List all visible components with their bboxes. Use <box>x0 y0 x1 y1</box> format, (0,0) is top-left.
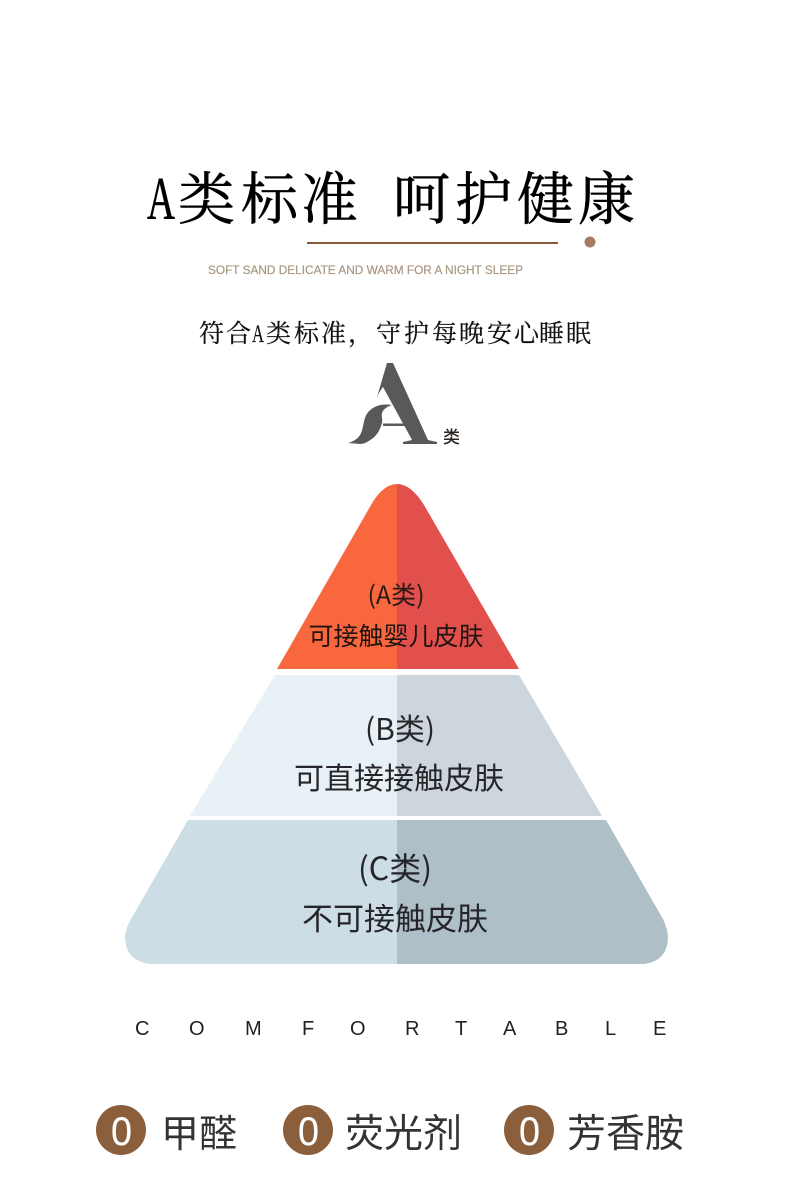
badge: zero fluorescent agent: 荧光剂 <box>345 1103 462 1159</box>
badge: zero fluorescent agent <box>283 1103 462 1159</box>
tagline: 类标准，守护每晚安心睡眠 <box>266 320 591 348</box>
badge: zero formaldehyde: 0 <box>111 1110 132 1154</box>
badge: zero aromatic amine: 芳香胺 <box>567 1103 684 1159</box>
english subtitle: SOFT SAND DELICATE AND WARM FOR A NIGHT SLEEP <box>208 265 523 277</box>
pyramid chart <box>125 484 668 964</box>
tagline: 符合 <box>199 320 251 348</box>
badge: zero formaldehyde: 甲醛 <box>161 1103 237 1158</box>
tagline: A <box>252 321 264 348</box>
tier C: (C类) <box>358 844 432 890</box>
badge: zero fluorescent agent: 0 <box>298 1110 319 1154</box>
badge: zero aromatic amine <box>504 1103 684 1159</box>
icon: A class logo: 类 <box>443 423 460 448</box>
badge: zero formaldehyde <box>96 1103 237 1158</box>
tier C <box>125 820 668 964</box>
icon: A class logo <box>348 363 460 448</box>
title <box>147 166 635 232</box>
tier A: 可接触婴儿皮肤 <box>308 617 484 653</box>
title: 类标准 <box>178 169 358 232</box>
tier C: 不可接触皮肤 <box>302 894 488 939</box>
badge: zero aromatic amine: 0 <box>519 1110 540 1154</box>
tier A <box>277 484 519 669</box>
title underline with dot <box>307 236 596 248</box>
tier A: (A类) <box>367 576 425 612</box>
tier B: (B类) <box>365 705 435 749</box>
tier B: 可直接接触皮肤 <box>294 754 504 798</box>
zero additive row <box>96 1103 684 1159</box>
title: A <box>147 166 175 232</box>
title: 呵护健康 <box>393 169 635 232</box>
comfortable label: COMFORTABLE <box>135 1018 666 1040</box>
tier B <box>190 675 602 816</box>
